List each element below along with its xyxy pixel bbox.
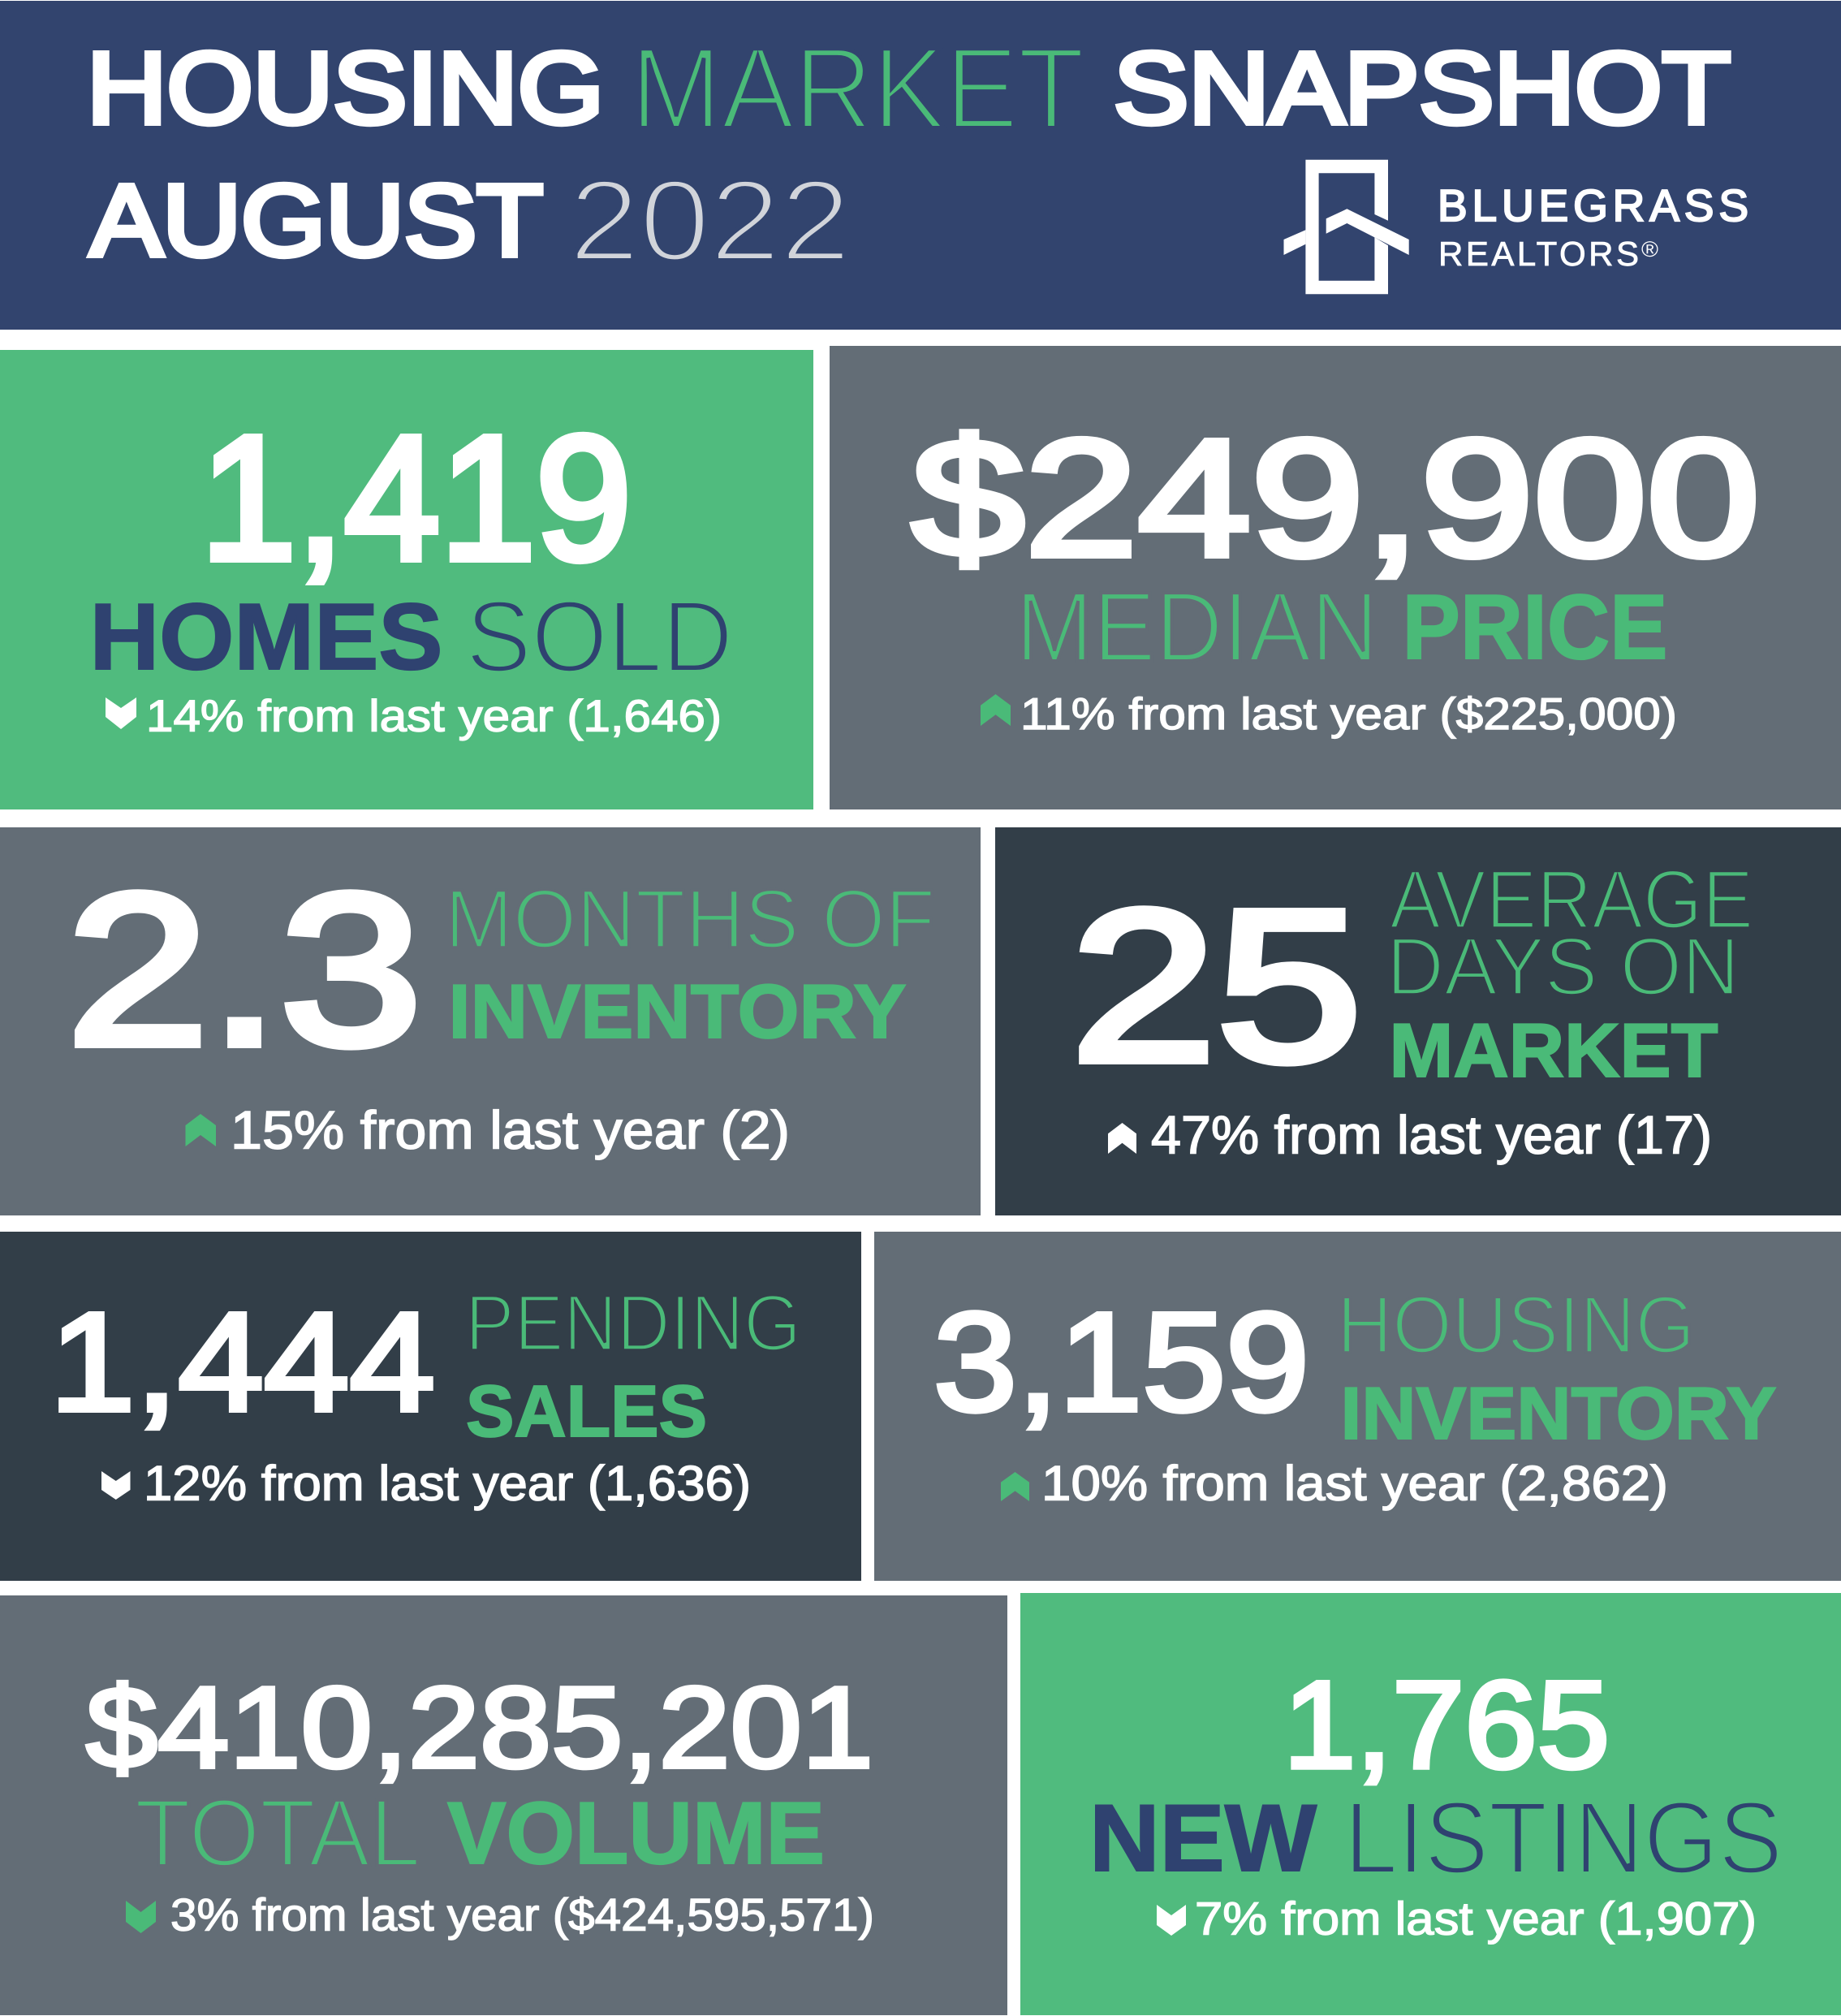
- label: months of inventory: [445, 872, 935, 1054]
- panel: pending sales: [0, 1232, 861, 1581]
- stat: 25: 25: [1071, 866, 1362, 1107]
- label: average days on market: AVERAGE: [1390, 853, 1753, 946]
- label: total volume: [135, 1780, 825, 1887]
- icon: down chevron: [106, 697, 136, 729]
- icon: up chevron: [185, 1114, 216, 1146]
- label: pending sales: [465, 1278, 801, 1453]
- icon: down chevron: [126, 1901, 156, 1933]
- title line 2: date: 2022: [569, 156, 851, 286]
- title line 1: MARKET: [631, 24, 1084, 153]
- label: pending sales: SALES: [466, 1371, 707, 1453]
- label: homes sold: HOMES: [89, 584, 443, 689]
- stat: 1,765: 1,765: [1283, 1656, 1610, 1794]
- label: total volume: TOTAL: [135, 1780, 420, 1887]
- logo wordmark: [1438, 180, 1748, 273]
- title line 1: HOUSING: [87, 32, 604, 145]
- icon: up chevron: [1108, 1123, 1136, 1154]
- icon: Bluegrass Realtors house logo: [1284, 160, 1409, 294]
- stat: $410,285,201: $410,285,201: [86, 1663, 873, 1793]
- stat: 1,444: 1,444: [50, 1283, 435, 1440]
- label: housing inventory: [1337, 1280, 1776, 1455]
- change: days on market: 47% from last year (17): [1151, 1104, 1712, 1164]
- label: average days on market: [1386, 853, 1753, 1093]
- label: median price: [1015, 572, 1667, 682]
- panel: new listings: [1020, 1593, 1841, 2015]
- label: average days on market: MARKET: [1390, 1008, 1718, 1093]
- panel: homes sold: [0, 350, 813, 809]
- label: housing inventory: INVENTORY: [1341, 1373, 1776, 1455]
- label: months of inventory: INVENTORY: [448, 969, 906, 1054]
- change: median price: 11% from last year ($225,000): [1020, 689, 1677, 739]
- label: new listings: LISTINGS: [1344, 1780, 1783, 1895]
- icon: down chevron: [101, 1471, 130, 1500]
- change: pending sales: 12% from last year (1,636): [144, 1455, 751, 1510]
- panel: average days on market: [995, 827, 1841, 1215]
- panel: median price: [830, 346, 1841, 809]
- label: average days on market: DAYS ON: [1386, 922, 1740, 1012]
- title line 2: date: [90, 156, 851, 286]
- stat: $249,900: $249,900: [912, 405, 1760, 591]
- label: housing inventory: HOUSING: [1337, 1280, 1695, 1371]
- stat: 1,419: 1,419: [200, 399, 632, 598]
- logo wordmark: BLUEGRASS: [1438, 180, 1748, 231]
- label: new listings: [1089, 1780, 1783, 1895]
- icon: down chevron: [1157, 1905, 1186, 1936]
- change: homes sold: 14% from last year (1,646): [146, 690, 722, 740]
- panel: total volume: [0, 1595, 1007, 2015]
- title line 1: SNAPSHOT: [1114, 32, 1731, 145]
- label: months of inventory: MONTHS OF: [445, 872, 935, 965]
- label: median price: PRICE: [1403, 576, 1667, 678]
- change: months of inventory: 15% from last year (2): [231, 1099, 790, 1159]
- label: pending sales: PENDING: [465, 1278, 801, 1367]
- title line 1: [87, 24, 1731, 153]
- logo wordmark: REALTORS: [1438, 235, 1639, 273]
- icon: up chevron: [981, 694, 1011, 726]
- stat: 2.3: 2.3: [67, 849, 422, 1090]
- change: total volume: 3% from last year ($424,595,571): [170, 1889, 874, 1940]
- change: housing inventory: 10% from last year (2,862): [1041, 1455, 1668, 1510]
- panel: months of inventory: [0, 827, 981, 1215]
- title line 2: date: AUGUST: [90, 164, 543, 278]
- label: homes sold: SOLD: [466, 581, 733, 693]
- stat: 3,159: 3,159: [933, 1283, 1309, 1440]
- logo wordmark: ®: [1641, 237, 1658, 261]
- label: median price: MEDIAN: [1015, 572, 1378, 682]
- label: homes sold: [89, 581, 733, 693]
- label: total volume: VOLUME: [447, 1784, 825, 1882]
- panel: header: [0, 1, 1841, 330]
- icon: up chevron: [1001, 1472, 1029, 1501]
- change: new listings: 7% from last year (1,907): [1195, 1893, 1757, 1945]
- label: new listings: NEW: [1089, 1785, 1317, 1891]
- panel: housing inventory: [874, 1232, 1841, 1581]
